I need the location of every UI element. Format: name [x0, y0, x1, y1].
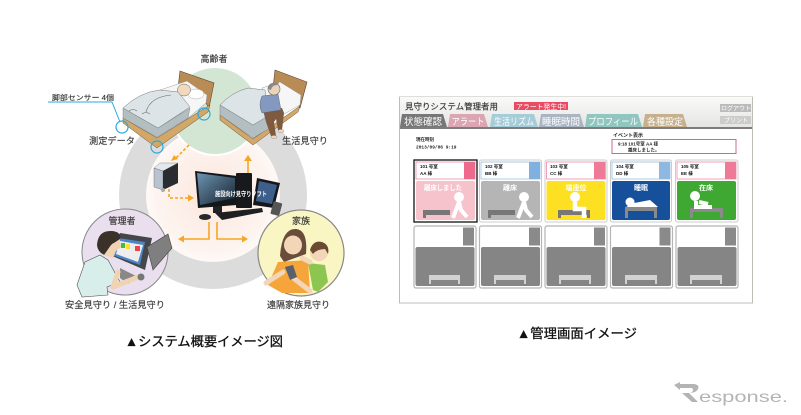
card 105 in bed: EE 様: [681, 170, 693, 176]
event display: 離床しました。: [628, 146, 660, 154]
event display: [612, 132, 736, 154]
elderly circle: [171, 67, 259, 155]
header buttons: プリント: [724, 118, 748, 124]
card 102 out of bed: 102 号室: [485, 163, 503, 170]
card 102 out of bed: BB 様: [485, 170, 498, 176]
PC monitor and tablet: 施設向け見守りソフト: [215, 189, 267, 198]
card 103 getting up: [545, 160, 607, 222]
card 102 out of bed: [480, 160, 542, 222]
card 103 getting up: CC 様: [550, 170, 563, 176]
card 105 in bed: 在床: [699, 183, 713, 192]
Response logo: [674, 382, 788, 406]
label: daily life monitoring: 生活見守り: [282, 135, 328, 146]
caption: system overview: ▲システム概要イメージ図: [125, 334, 283, 349]
gray ring: [132, 114, 294, 276]
card 101 awake: [414, 160, 477, 222]
caption: management screen: ▲管理画面イメージ: [517, 326, 637, 341]
bed with sleeping person: [123, 71, 214, 148]
label: measurement data: 測定データ: [89, 135, 135, 146]
PC monitor and tablet: [195, 171, 282, 220]
foot sensor callout: [48, 93, 210, 153]
card 103 getting up: 端座位: [566, 183, 586, 192]
tabs: 睡眠時間: [542, 116, 580, 128]
family circle: [258, 210, 344, 296]
current time: 現在時刻: [416, 136, 434, 143]
Response logo: esponse.: [699, 389, 788, 406]
card 101 awake: 101 号室: [420, 163, 438, 170]
screen frame: [400, 97, 752, 303]
arrows: [169, 145, 252, 242]
tabs: [400, 114, 687, 128]
header buttons: ログアウト: [721, 104, 751, 112]
family circle: 家族: [292, 215, 310, 226]
management screen: [400, 97, 752, 303]
empty room cards row: [414, 226, 738, 288]
bed with seated person: [220, 70, 307, 145]
event display: 9:18 101号室 AA 様: [618, 140, 659, 148]
card 105 in bed: [676, 160, 738, 222]
card 101 awake: 離床しました: [424, 183, 462, 192]
card 104 sleeping: DD 様: [616, 170, 629, 176]
label: remote family monitoring: 遠隔家族見守り: [267, 299, 330, 310]
tabs: 状態確認: [404, 116, 442, 128]
current time: 2013/09/06 9:19: [416, 144, 457, 150]
system overview diagram: [48, 53, 344, 310]
event display: イベント表示: [613, 132, 643, 139]
header buttons: [720, 104, 751, 124]
label: safety and life monitoring: 安全見守り / 生活見守り: [65, 299, 165, 310]
current time: [416, 136, 457, 150]
tabs: 生活リズム: [494, 116, 534, 128]
manager circle: [77, 209, 172, 297]
screen title: 見守りシステム管理者用: [405, 102, 498, 112]
card 101 awake: AA 様: [420, 170, 433, 176]
card 103 getting up: 103 号室: [550, 163, 568, 170]
foot sensor callout: 脚部センサー 4個: [52, 93, 114, 102]
card 104 sleeping: 104 号室: [616, 163, 634, 170]
card 104 sleeping: 睡眠: [634, 183, 648, 192]
tabs: 各種設定: [647, 116, 683, 128]
alert badge: アラート発生中!: [516, 102, 566, 111]
tabs: アラート: [452, 117, 484, 128]
manager circle: 管理者: [108, 215, 136, 226]
card 104 sleeping: [610, 160, 672, 222]
tabs: プロフィール: [588, 117, 638, 128]
card 105 in bed: 105 号室: [681, 163, 699, 170]
screen header: [400, 97, 752, 128]
label: elderly: 高齢者: [200, 53, 228, 64]
card 102 out of bed: 離床: [503, 183, 517, 192]
data collector box: [154, 163, 178, 192]
